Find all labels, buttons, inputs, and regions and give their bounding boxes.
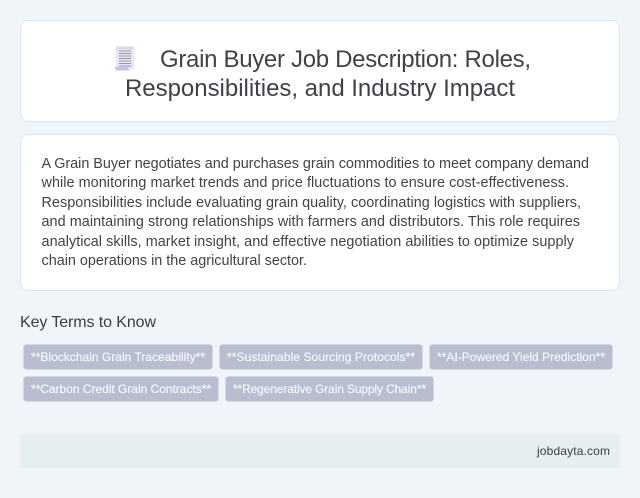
- tag list: [24, 344, 612, 402]
- description text: analytical skills, market insight, and effective negotiation abilities to optimize supply: [42, 234, 575, 250]
- description text: chain operations in the agricultural sector.: [42, 253, 307, 269]
- icon: receipt scroll: [115, 46, 134, 70]
- footer bar: jobdayta.com: [536, 444, 610, 458]
- tag: carbon credit: [24, 376, 218, 402]
- heading: key terms: Key Terms to Know: [20, 314, 156, 331]
- tag: AI yield: [430, 344, 612, 370]
- description text: and maintaining strong relationships with farmers and distributors. This role requires: [42, 214, 580, 230]
- title: Responsibilities, and Industry Impact: [125, 75, 515, 102]
- description text: Responsibilities include evaluating grain quality, coordinating logistics with suppliers,: [42, 195, 581, 211]
- panel: description card: [20, 134, 620, 290]
- tag: regenerative: **Regenerative Grain Supply Chain**: [233, 382, 426, 396]
- title: [125, 46, 531, 102]
- panel: title card: [20, 20, 620, 122]
- footer bar: [20, 434, 620, 468]
- tag: carbon credit: **Carbon Credit Grain Contracts**: [31, 382, 211, 396]
- tag: regenerative: [226, 376, 434, 402]
- tag: sustainable: **Sustainable Sourcing Protocols**: [227, 350, 415, 364]
- tag: sustainable: [220, 344, 422, 370]
- description text: while monitoring market trends and price fluctuations to ensure cost-effectiveness.: [40, 175, 569, 191]
- tag: blockchain: [24, 344, 212, 370]
- description text: [40, 156, 589, 269]
- tag: AI yield: **AI-Powered Yield Prediction**: [437, 350, 605, 364]
- description text: A Grain Buyer negotiates and purchases grain commodities to meet company demand: [42, 156, 589, 172]
- title: Grain Buyer Job Description: Roles,: [160, 46, 531, 73]
- tag: blockchain: **Blockchain Grain Traceability**: [31, 350, 205, 364]
